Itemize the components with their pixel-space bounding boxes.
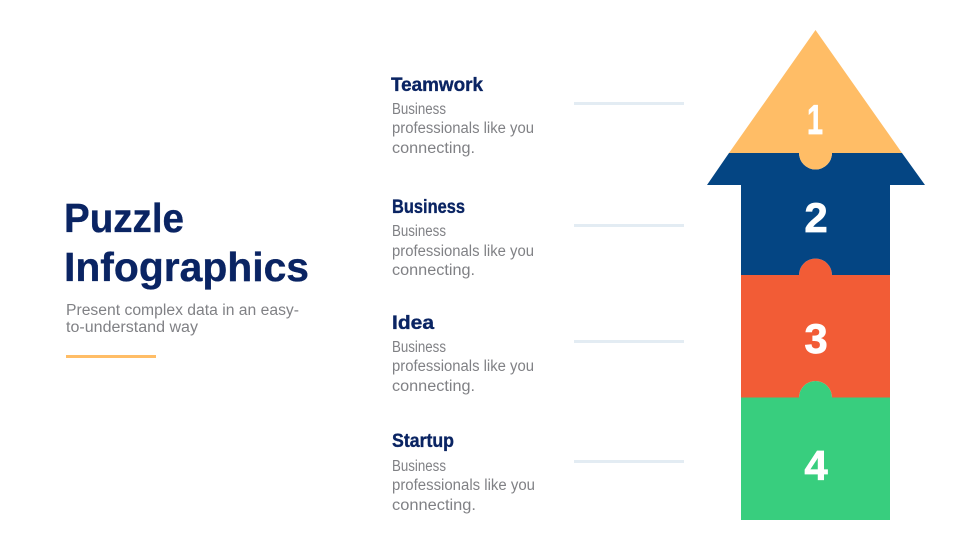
item 4 connector line [574, 460, 684, 463]
piece 2: navy arrow shoulders [707, 153, 925, 275]
item 1 connector line [574, 102, 684, 105]
piece 4: green base [741, 381, 890, 520]
item 2 connector line [574, 224, 684, 227]
piece 3: orange block: 3 [804, 315, 828, 362]
item 4 text: connecting. [392, 497, 476, 514]
item 1 text [392, 101, 534, 157]
subtitle: Present complex data in an easy- [66, 302, 299, 319]
heading [64, 195, 309, 290]
subtitle: to-understand way [66, 319, 198, 336]
item 3 text: professionals like you [392, 358, 534, 375]
item 3 text: Business [392, 339, 446, 356]
piece 3: orange block [741, 259, 890, 398]
item 1 text: Business [392, 101, 446, 118]
item 2: Business [392, 196, 684, 279]
item 2 heading: Business [392, 196, 465, 218]
item 3 text: connecting. [392, 378, 475, 395]
item 4 text: professionals like you [392, 477, 535, 494]
item 3 heading: Idea [392, 312, 434, 334]
item 3 text [392, 339, 534, 395]
item 1: Teamwork [391, 74, 684, 157]
item 1 heading: Teamwork [391, 74, 483, 96]
subtitle [66, 302, 299, 336]
piece 1: yellow arrow tip: 1 [807, 96, 823, 143]
item 1 text: connecting. [392, 140, 475, 157]
piece 2: navy arrow shoulders: 2 [804, 194, 828, 241]
accent underline [66, 355, 156, 358]
item 3: Idea [392, 312, 684, 395]
piece 4: green base: 4 [804, 442, 828, 489]
item 4 text: Business [392, 458, 446, 475]
item 3 connector line [574, 340, 684, 343]
item 2 text [392, 223, 534, 279]
item 4 text [392, 458, 535, 514]
item 1 text: professionals like you [392, 120, 534, 137]
heading: Puzzle [64, 195, 184, 241]
item 2 text: professionals like you [392, 243, 534, 260]
item 4 heading: Startup [392, 430, 454, 452]
item 2 text: connecting. [392, 262, 475, 279]
puzzle arrow [707, 30, 925, 520]
item 2 text: Business [392, 223, 446, 240]
piece 1: yellow arrow tip [729, 30, 902, 170]
heading: Infographics [64, 244, 309, 290]
title block [64, 195, 309, 358]
item 4: Startup [392, 430, 684, 514]
